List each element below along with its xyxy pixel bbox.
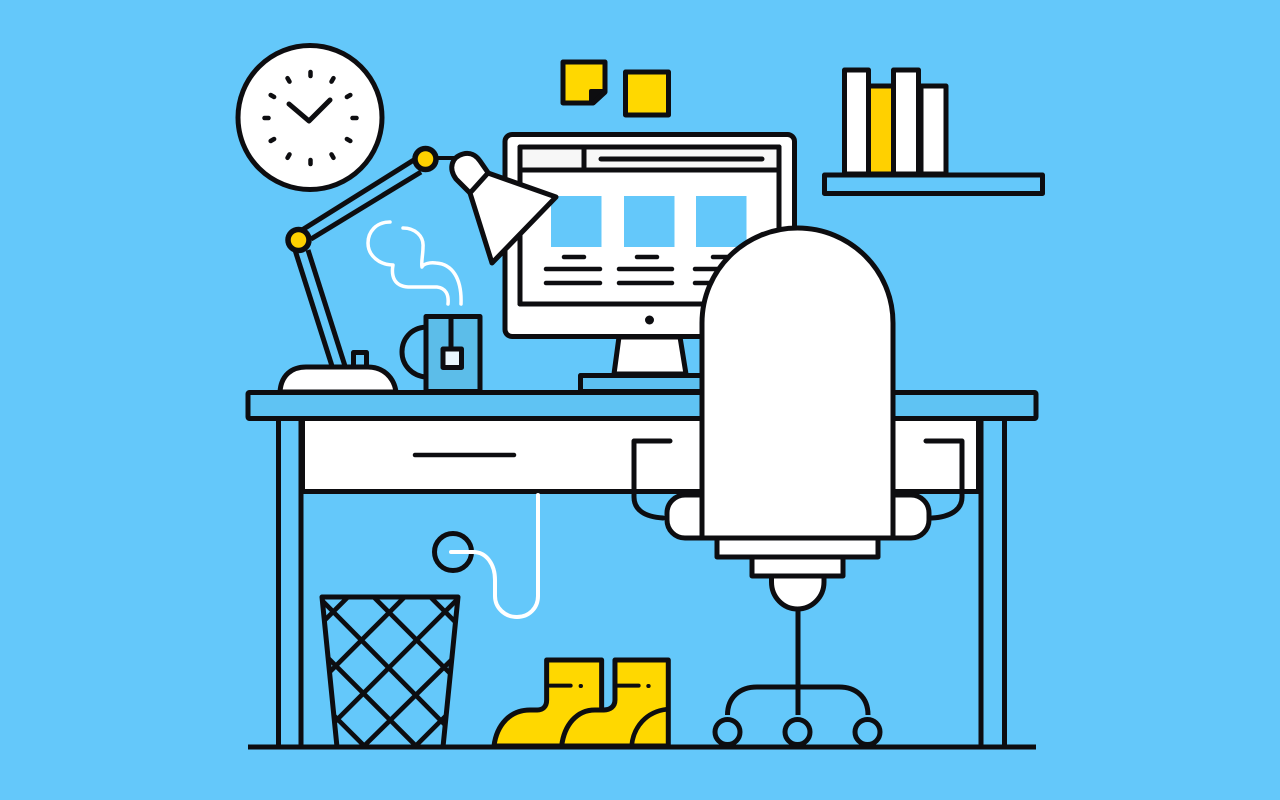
monitor stand xyxy=(614,337,686,374)
drawer handle xyxy=(415,453,514,457)
lamp switch xyxy=(354,352,366,367)
right leg xyxy=(981,418,1004,747)
lamp neck xyxy=(452,153,489,193)
drawer panel xyxy=(302,418,978,492)
lamp base xyxy=(280,367,396,392)
monitor xyxy=(505,134,794,392)
chair ball joint xyxy=(772,576,824,609)
monitor body xyxy=(505,134,794,336)
lamp shade xyxy=(470,173,556,263)
book: white tall right xyxy=(894,70,918,174)
book: yellow xyxy=(868,86,894,174)
content tile 2 xyxy=(624,196,674,247)
upper arm xyxy=(302,158,421,239)
mug handle xyxy=(402,327,426,377)
toe cap xyxy=(632,709,667,746)
joint: lower xyxy=(288,230,309,250)
shelf board xyxy=(824,175,1042,194)
left drawer bracket xyxy=(634,441,670,518)
text lines xyxy=(546,257,740,283)
caster right xyxy=(855,720,880,744)
white cable xyxy=(451,495,538,617)
chair stem xyxy=(796,609,800,715)
icon: sticky note xyxy=(626,72,668,115)
tea bag string xyxy=(448,316,454,349)
yellow boots xyxy=(494,660,668,746)
caster left xyxy=(715,720,740,744)
power dot xyxy=(645,316,654,324)
floor line xyxy=(248,744,1036,750)
book: white tall left xyxy=(844,70,868,174)
seat plate xyxy=(717,538,878,557)
left boot xyxy=(494,660,602,746)
lamp connector xyxy=(436,156,456,160)
illustration: workspace scene xyxy=(236,43,1045,750)
right drawer bracket xyxy=(926,441,962,518)
chair base arms xyxy=(728,687,868,715)
caster centre xyxy=(785,720,810,744)
coffee mug xyxy=(402,316,480,392)
joint: upper xyxy=(415,148,436,170)
content tile 3 xyxy=(696,196,746,247)
icon: wall clock xyxy=(238,46,382,190)
book: white short xyxy=(921,86,946,174)
lower arm xyxy=(295,250,345,366)
steam xyxy=(368,222,461,304)
desk top xyxy=(248,392,1036,418)
desk xyxy=(248,392,1036,747)
tea tag xyxy=(443,349,462,368)
icon: sticky note with folded corner xyxy=(563,62,605,103)
right armrest xyxy=(869,495,929,538)
shelf with books xyxy=(824,70,1042,194)
chair back xyxy=(702,228,893,538)
seat mount xyxy=(752,557,843,576)
left armrest xyxy=(667,495,727,538)
mug body xyxy=(426,316,480,392)
content tile 1 xyxy=(551,196,602,247)
left leg xyxy=(278,418,301,747)
desk lamp xyxy=(280,148,556,392)
power outlet xyxy=(434,534,472,570)
right boot xyxy=(562,660,668,746)
office chair xyxy=(634,228,962,744)
boot marks xyxy=(550,680,649,692)
screen xyxy=(520,147,779,304)
monitor foot xyxy=(580,376,706,392)
waste basket xyxy=(320,594,460,744)
